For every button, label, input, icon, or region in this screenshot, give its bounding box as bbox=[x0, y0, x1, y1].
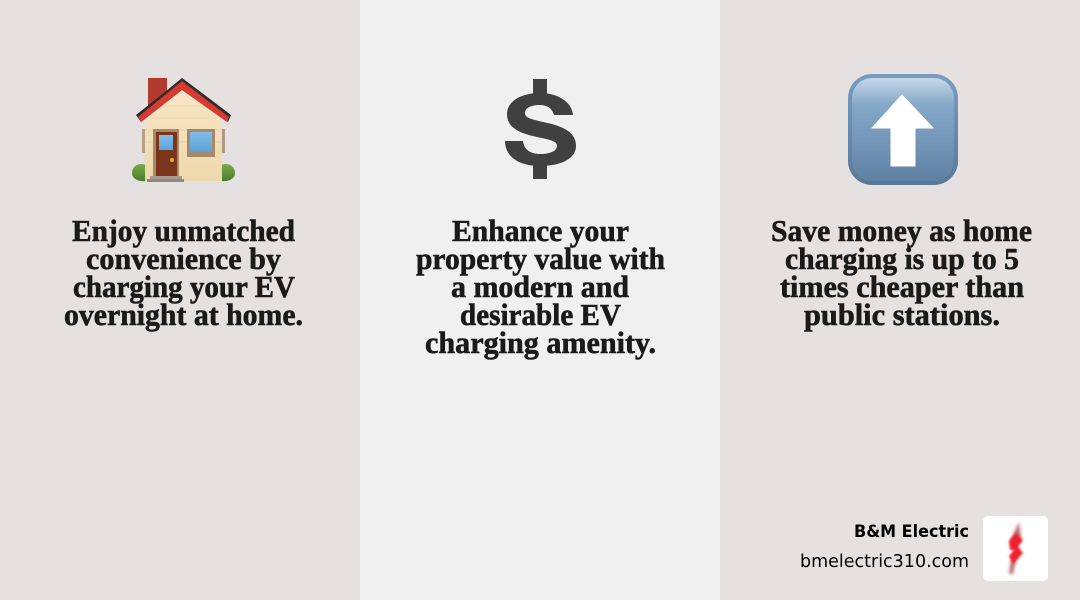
heading: savings: public stations. bbox=[804, 297, 1000, 332]
heading: property value bbox=[416, 213, 665, 360]
panel: savings bbox=[720, 0, 1080, 600]
icon: house bbox=[132, 78, 235, 182]
footer: brand bbox=[800, 516, 1048, 581]
brand name: B&M Electric bbox=[854, 522, 969, 541]
heading: property value: charging amenity. bbox=[425, 325, 656, 360]
icon: up arrow button bbox=[848, 74, 958, 185]
logo: red lightning bolt bbox=[983, 516, 1048, 581]
heading: savings: Save money as home bbox=[771, 213, 1032, 248]
heading: convenience: convenience by bbox=[86, 241, 281, 276]
heading: convenience: Enjoy unmatched bbox=[72, 213, 295, 248]
heading: property value: Enhance your bbox=[452, 213, 629, 248]
heading: convenience bbox=[64, 213, 303, 332]
heading: convenience: overnight at home. bbox=[64, 297, 303, 332]
panel: property value bbox=[360, 0, 720, 600]
heading: property value: a modern and bbox=[451, 269, 629, 304]
icon: dollar sign bbox=[505, 79, 576, 179]
heading: property value: property value with bbox=[416, 241, 665, 276]
panel: convenience bbox=[0, 0, 360, 600]
heading: convenience: charging your EV bbox=[73, 269, 296, 304]
heading: property value: desirable EV bbox=[460, 297, 622, 332]
heading: savings bbox=[771, 213, 1032, 332]
heading: savings: charging is up to 5 bbox=[785, 241, 1019, 276]
website: bmelectric310.com bbox=[800, 552, 969, 572]
heading: savings: times cheaper than bbox=[780, 269, 1024, 304]
